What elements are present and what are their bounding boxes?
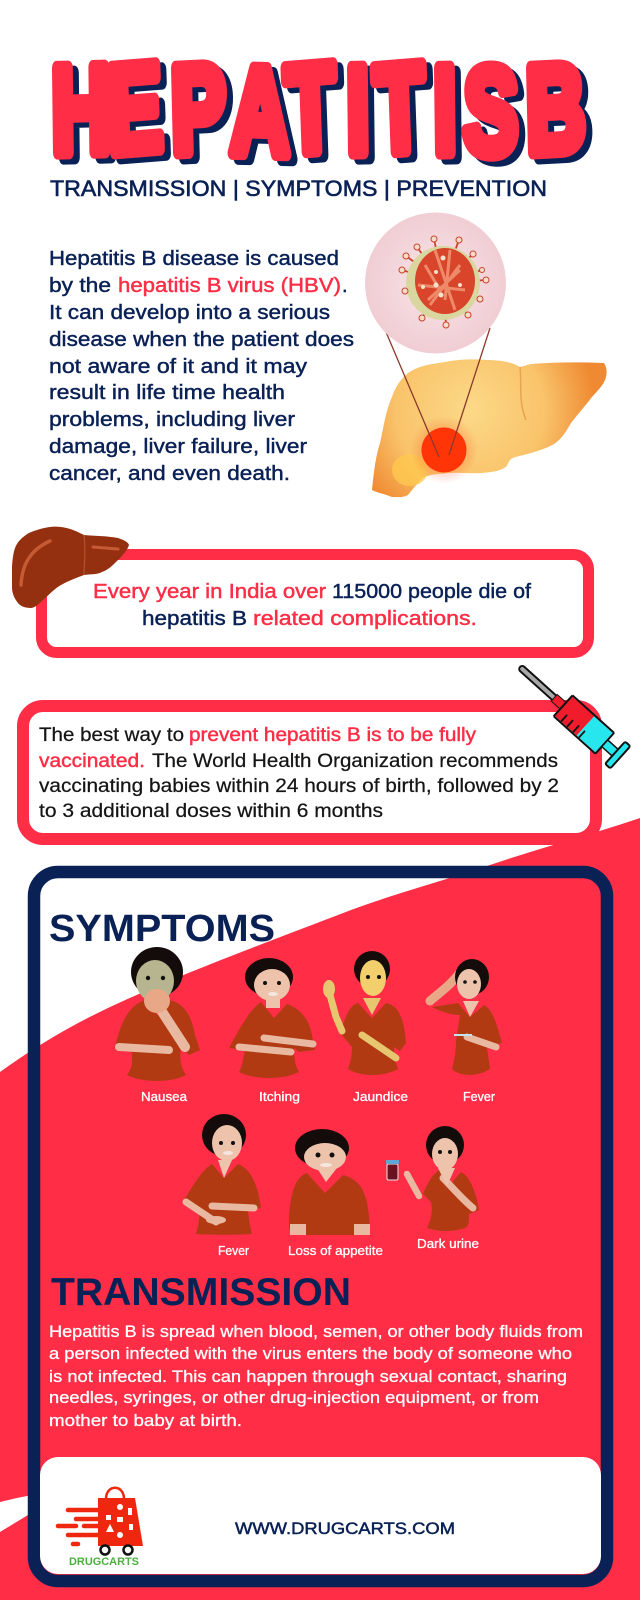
panel: footer	[40, 1457, 601, 1574]
subtitle: TRANSMISSION | SYMPTOMS | PREVENTION	[50, 176, 547, 201]
symptom labels row 1: Nausea	[141, 1090, 187, 1104]
symptom labels row 2	[218, 1237, 479, 1258]
statistic text: Every year in India over	[93, 581, 326, 603]
red background swoosh	[0, 818, 640, 1600]
figure: itching	[229, 958, 315, 1078]
illustration: liver with magnified virus	[365, 212, 607, 497]
prevention text: vaccinated.	[39, 750, 145, 772]
intro text block: not aware of it and it may	[49, 356, 307, 378]
figure: nausea	[116, 947, 200, 1081]
symptom labels row 2: Fever	[218, 1244, 249, 1258]
icon: virus	[399, 236, 489, 328]
figure: abdominal pain	[184, 1114, 261, 1235]
icon: syringe	[510, 656, 630, 768]
transmission text	[49, 1322, 583, 1430]
prevention text	[39, 724, 559, 822]
prevention text: The best way to	[39, 724, 184, 746]
transmission text: needles, syringes, or other drug-injection equipment, or from	[49, 1388, 539, 1407]
symptom labels row 2: Dark urine	[417, 1237, 479, 1251]
title: HEPATITIS B	[51, 38, 587, 182]
prevention text: to 3 additional doses within 6 months	[39, 800, 383, 822]
statistic text: 115000 people die of	[332, 581, 531, 603]
logo: drugcarts: DRUGCARTS	[69, 1556, 139, 1568]
statistic text: hepatitis B	[142, 608, 247, 630]
transmission text: mother to baby at birth.	[49, 1411, 242, 1430]
prevention text: The World Health Organization recommends	[152, 750, 558, 772]
intro text block: disease when the patient does	[49, 329, 354, 351]
prevention text: vaccinating babies within 24 hours of birth, followed by 2	[39, 775, 559, 797]
panel: prevention	[23, 706, 596, 839]
intro text block: It can develop into a serious	[49, 302, 330, 324]
intro text block: damage, liver failure, liver	[49, 436, 307, 458]
symptom labels row 1: Fever	[463, 1090, 495, 1104]
intro text block: problems, including liver	[49, 409, 295, 431]
zoom lines	[386, 328, 490, 457]
heading: symptoms: SYMPTOMS	[49, 908, 275, 950]
transmission text: Hepatitis B is spread when blood, semen, or other body fluids from	[49, 1322, 583, 1341]
symptom labels row 1: Itching	[259, 1090, 300, 1104]
statistic text	[93, 581, 531, 630]
prevention text: prevent hepatitis B is to be fully	[189, 724, 476, 746]
website address: WWW.DRUGCARTS.COM	[235, 1519, 455, 1538]
icon: large liver	[372, 359, 607, 497]
figure: dark urine sample	[386, 1126, 479, 1231]
symptom labels row 1: Jaundice	[353, 1090, 408, 1104]
symptom labels row 1	[141, 1090, 495, 1104]
intro text block: Hepatitis B disease is caused	[49, 248, 339, 270]
intro text block: hepatitis B virus (HBV)	[118, 275, 341, 297]
intro text block	[49, 248, 354, 485]
heading: transmission: TRANSMISSION	[51, 1271, 351, 1314]
figure: loss of appetite	[289, 1129, 370, 1235]
magnifying circle	[365, 212, 506, 354]
icon: liver	[12, 527, 129, 608]
intro text block: result in life time health	[49, 382, 285, 404]
intro text block: by the	[49, 275, 111, 297]
figure: jaundice	[323, 951, 406, 1075]
transmission text: a person infected with the virus enters the body of someone who	[49, 1344, 572, 1363]
symptom labels row 2: Loss of appetite	[288, 1244, 383, 1258]
intro text block: cancer, and even death.	[49, 463, 290, 485]
panel: statistic callout	[42, 554, 588, 652]
intro text block: .	[342, 275, 348, 297]
logo: drugcarts	[58, 1488, 143, 1568]
transmission text: is not infected. This can happen through sexual contact, sharing	[49, 1367, 567, 1386]
figure: fever with thermometer	[430, 959, 502, 1075]
panel: symptoms and transmission frame	[34, 872, 607, 1581]
statistic text: related complications.	[253, 608, 477, 630]
